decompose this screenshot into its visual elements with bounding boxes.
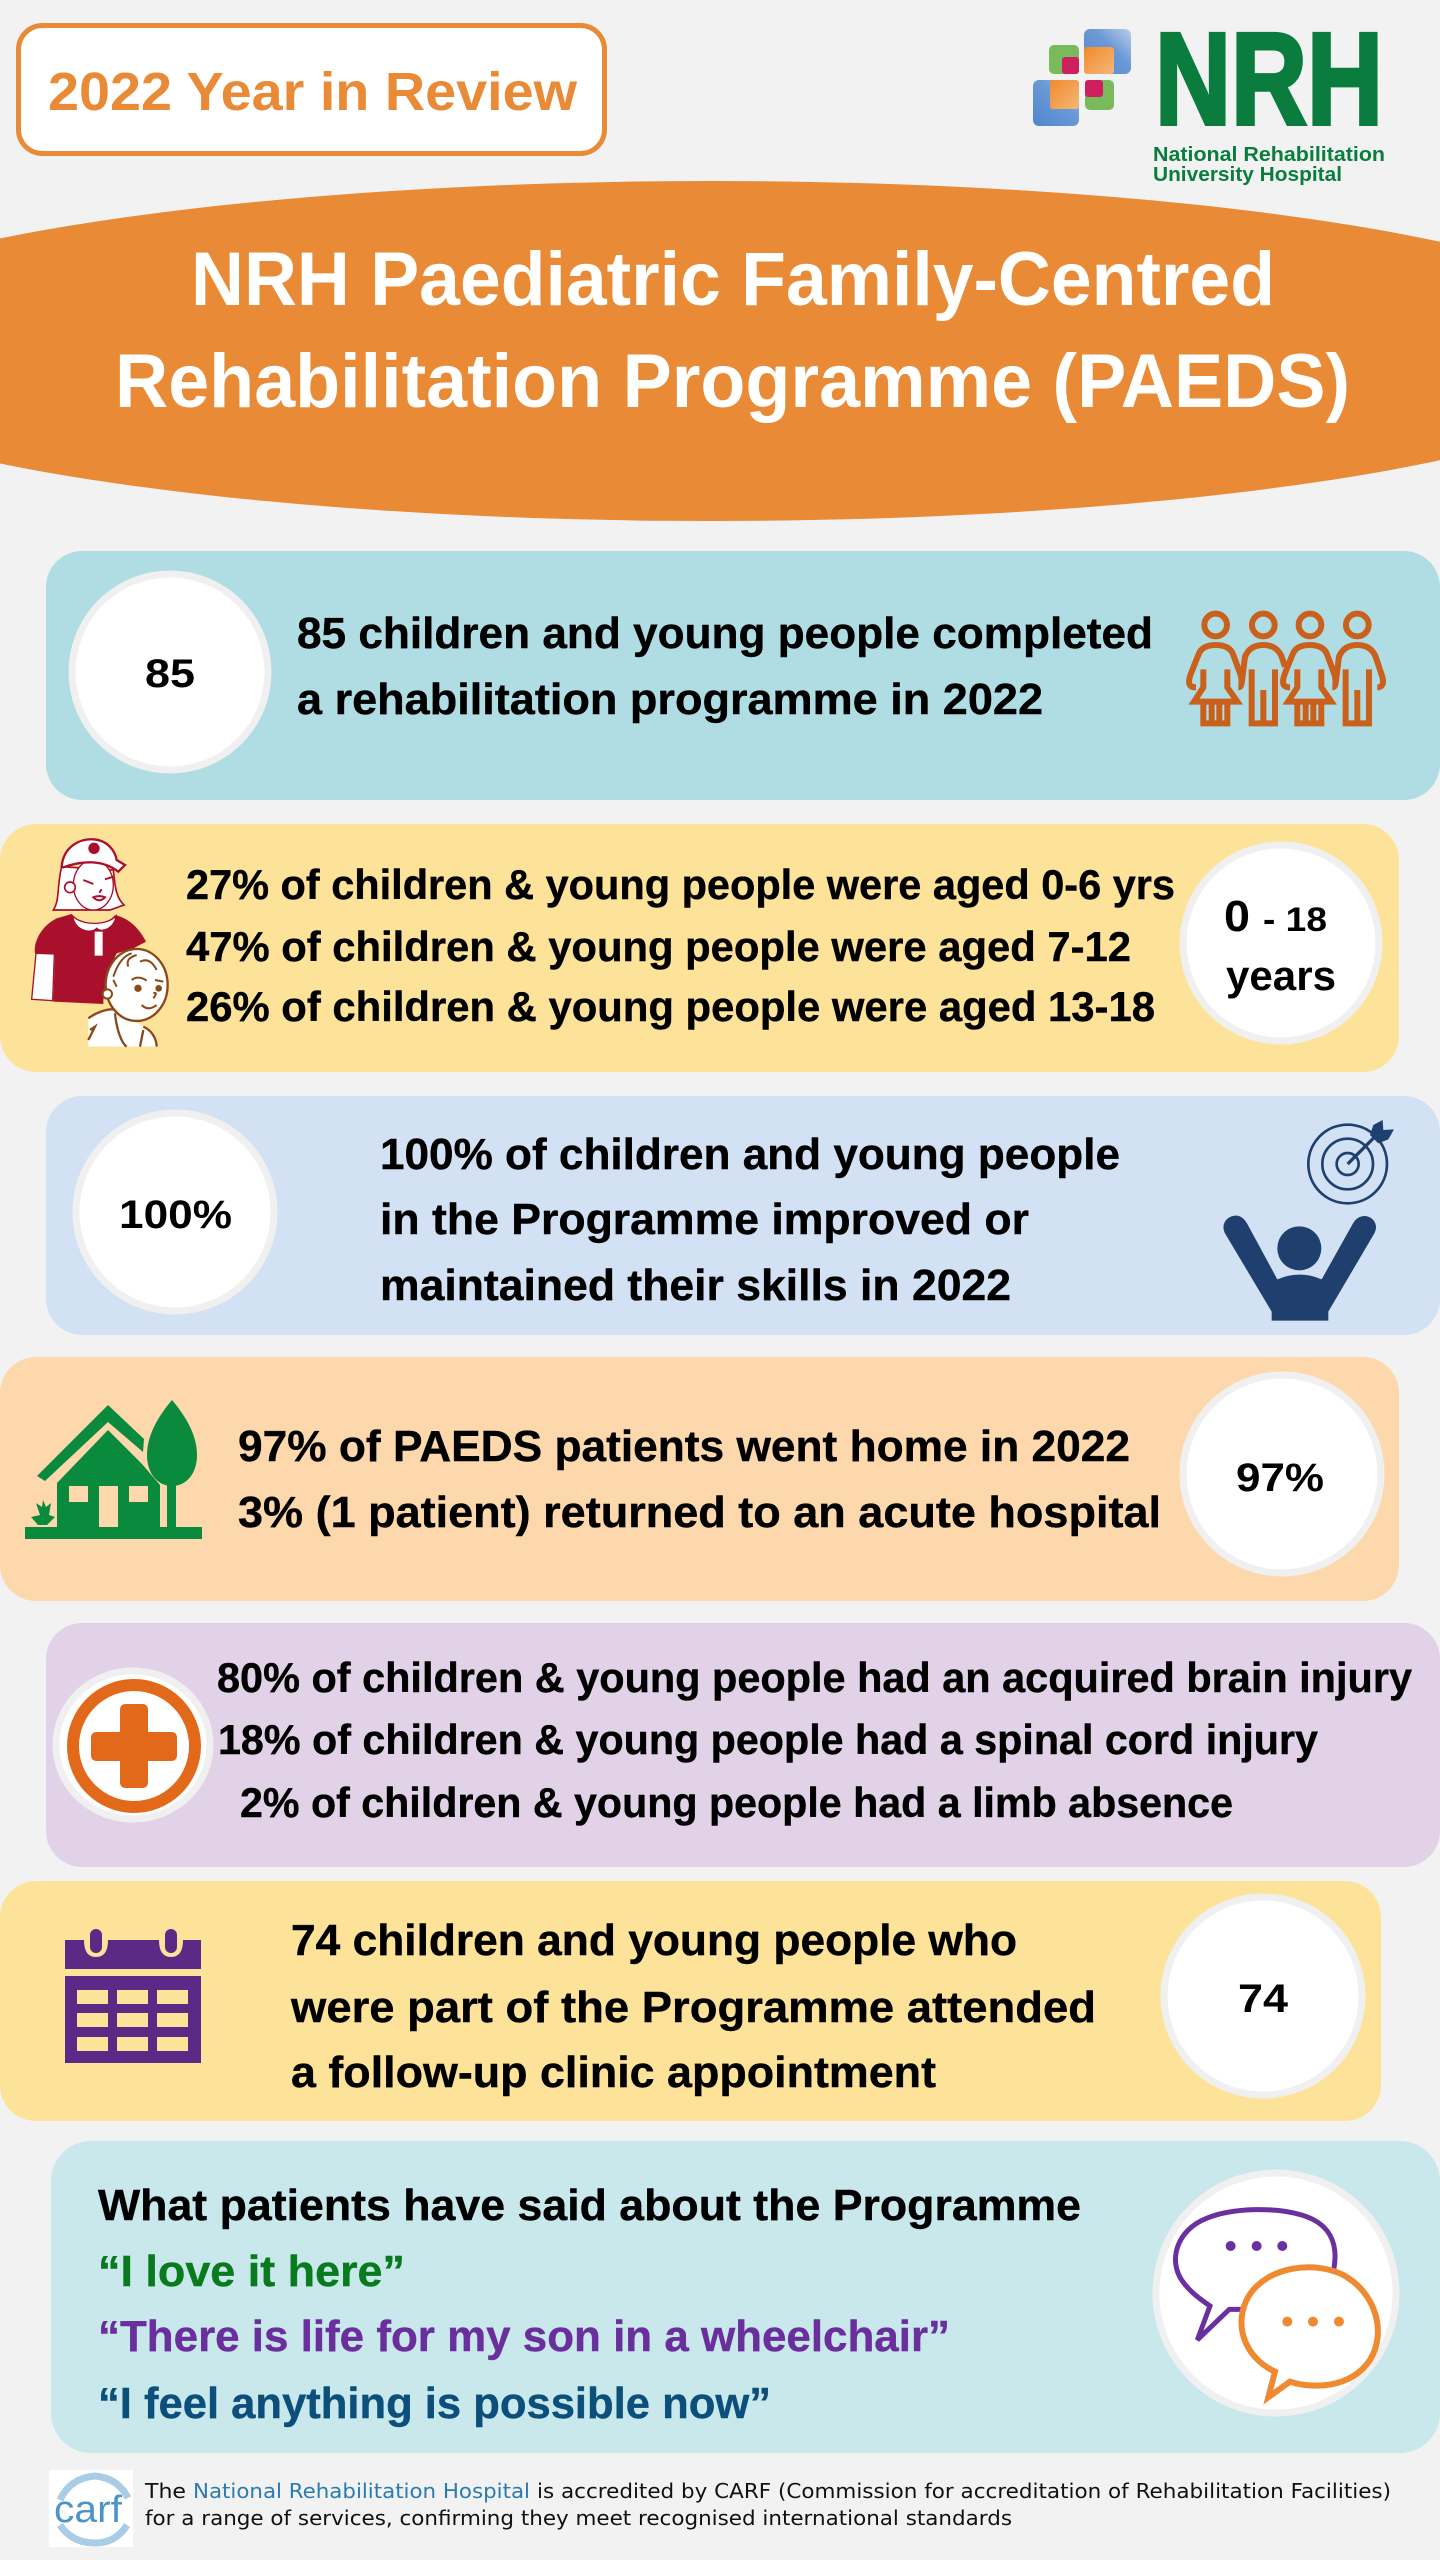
stat circle: 85 bbox=[72, 574, 268, 770]
text block: 3% (1 patient) returned to an acute hospital bbox=[238, 1488, 1161, 1537]
stat circle: 100% bbox=[76, 1113, 274, 1311]
badge: 2022 Year in Review: 2022 Year in Review bbox=[48, 62, 578, 122]
logo wordmark: NRH bbox=[1155, 5, 1383, 152]
text block bbox=[186, 861, 1175, 1030]
footer: accreditation note: is accredited by CARF (Commission for accreditation of Rehabilitation Facilities) bbox=[537, 2479, 1391, 2503]
title: NRH Paediatric Family-Centred bbox=[191, 237, 1275, 322]
text block bbox=[238, 1422, 1161, 1537]
title banner bbox=[0, 181, 1440, 521]
stat circle: 0-18 years bbox=[1183, 845, 1379, 1041]
badge: 2022 Year in Review bbox=[18, 26, 604, 154]
footer: accreditation note: for a range of services, confirming they meet recognised international standards bbox=[145, 2506, 1012, 2530]
text block bbox=[290, 1916, 1096, 2097]
text block: were part of the Programme attended bbox=[290, 1983, 1096, 2032]
panel: age breakdown bbox=[0, 824, 1399, 1072]
panel: improved or maintained skills bbox=[46, 1096, 1440, 1335]
stat circle: 85: 85 bbox=[145, 652, 195, 696]
quotes: “There is life for my son in a wheelchair” bbox=[98, 2312, 950, 2361]
icon: NRH logo squares bbox=[1033, 29, 1131, 126]
title: Rehabilitation Programme (PAEDS) bbox=[115, 339, 1350, 424]
text block: 100% of children and young people bbox=[380, 1130, 1120, 1179]
stat circle: 100%: 100% bbox=[119, 1193, 232, 1237]
logo subtitle: University Hospital bbox=[1153, 164, 1342, 186]
footer: accreditation note: The bbox=[144, 2479, 186, 2503]
title bbox=[115, 237, 1350, 424]
text block bbox=[380, 1130, 1120, 1310]
stat circle: 97%: 97% bbox=[1236, 1456, 1324, 1500]
text block bbox=[217, 1654, 1413, 1826]
panel: patient quotes bbox=[51, 2141, 1440, 2453]
stat circle: 0-18 years: years bbox=[1226, 952, 1336, 999]
heading: What patients have said about the Programme bbox=[98, 2181, 1081, 2230]
logo subtitle bbox=[1153, 144, 1385, 186]
quotes: “I feel anything is possible now” bbox=[98, 2379, 771, 2428]
text block: 18% of children & young people had a spinal cord injury bbox=[218, 1716, 1319, 1763]
quotes bbox=[98, 2247, 950, 2428]
text block: 97% of PAEDS patients went home in 2022 bbox=[238, 1422, 1130, 1471]
quotes: “I love it here” bbox=[98, 2247, 405, 2296]
footer: accreditation note: National Rehabilitation Hospital bbox=[193, 2479, 530, 2503]
logo: CARF bbox=[49, 2470, 133, 2547]
text block: 26% of children & young people were aged 13-18 bbox=[186, 983, 1155, 1030]
icon: person with raised arms and target bbox=[1223, 1120, 1394, 1321]
text block: 27% of children & young people were aged 0-6 yrs bbox=[186, 861, 1175, 908]
panel: follow-up clinic bbox=[0, 1881, 1381, 2121]
footer: accreditation note bbox=[144, 2479, 1391, 2530]
text block: in the Programme improved or bbox=[380, 1195, 1029, 1244]
stat circle: 0-18 years: - 18 bbox=[1263, 901, 1327, 939]
text block: 85 children and young people completed bbox=[297, 609, 1153, 658]
text block: 74 children and young people who bbox=[291, 1916, 1017, 1965]
text block: 47% of children & young people were aged 7-12 bbox=[186, 923, 1131, 970]
stat circle: 74: 74 bbox=[1238, 1977, 1289, 2021]
logo: CARF: carf bbox=[54, 2489, 122, 2531]
icon: house and tree bbox=[25, 1400, 202, 1539]
logo: NRH National Rehabilitation University Hospital bbox=[1033, 5, 1385, 186]
icon: speech bubbles bbox=[1156, 2173, 1396, 2413]
logo subtitle: National Rehabilitation bbox=[1153, 144, 1385, 166]
stat circle: 0-18 years: 0 bbox=[1224, 892, 1250, 941]
text block: a rehabilitation programme in 2022 bbox=[297, 675, 1043, 724]
stat circle: 97% bbox=[1183, 1375, 1381, 1573]
stat circle: 74 bbox=[1164, 1897, 1362, 2095]
panel: discharge destination bbox=[0, 1357, 1399, 1601]
text block: 80% of children & young people had an acquired brain injury bbox=[217, 1654, 1413, 1701]
panel: injury types bbox=[46, 1623, 1440, 1867]
text block: 2% of children & young people had a limb absence bbox=[240, 1779, 1233, 1826]
text block bbox=[297, 609, 1153, 724]
panel: children completed programme bbox=[46, 551, 1440, 800]
icon: medical cross bbox=[56, 1671, 210, 1819]
text block: maintained their skills in 2022 bbox=[380, 1261, 1011, 1310]
icon: calendar bbox=[65, 1929, 201, 2063]
icon: four children bbox=[1189, 614, 1383, 723]
text block: a follow-up clinic appointment bbox=[291, 2048, 936, 2097]
icon: mother and child bbox=[32, 839, 168, 1047]
